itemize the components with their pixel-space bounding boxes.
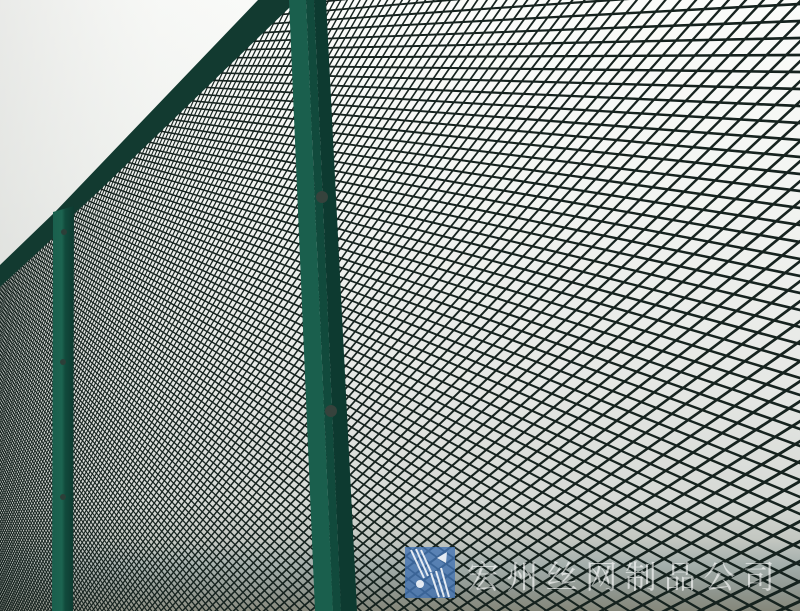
bolt upper (316, 191, 328, 203)
far post (52, 206, 74, 611)
bolt lower (325, 405, 337, 417)
top rail (0, 0, 292, 287)
watermark text: 宏州丝网制品公司 (467, 559, 782, 595)
watermark logo (405, 547, 455, 598)
near post (289, 0, 357, 611)
